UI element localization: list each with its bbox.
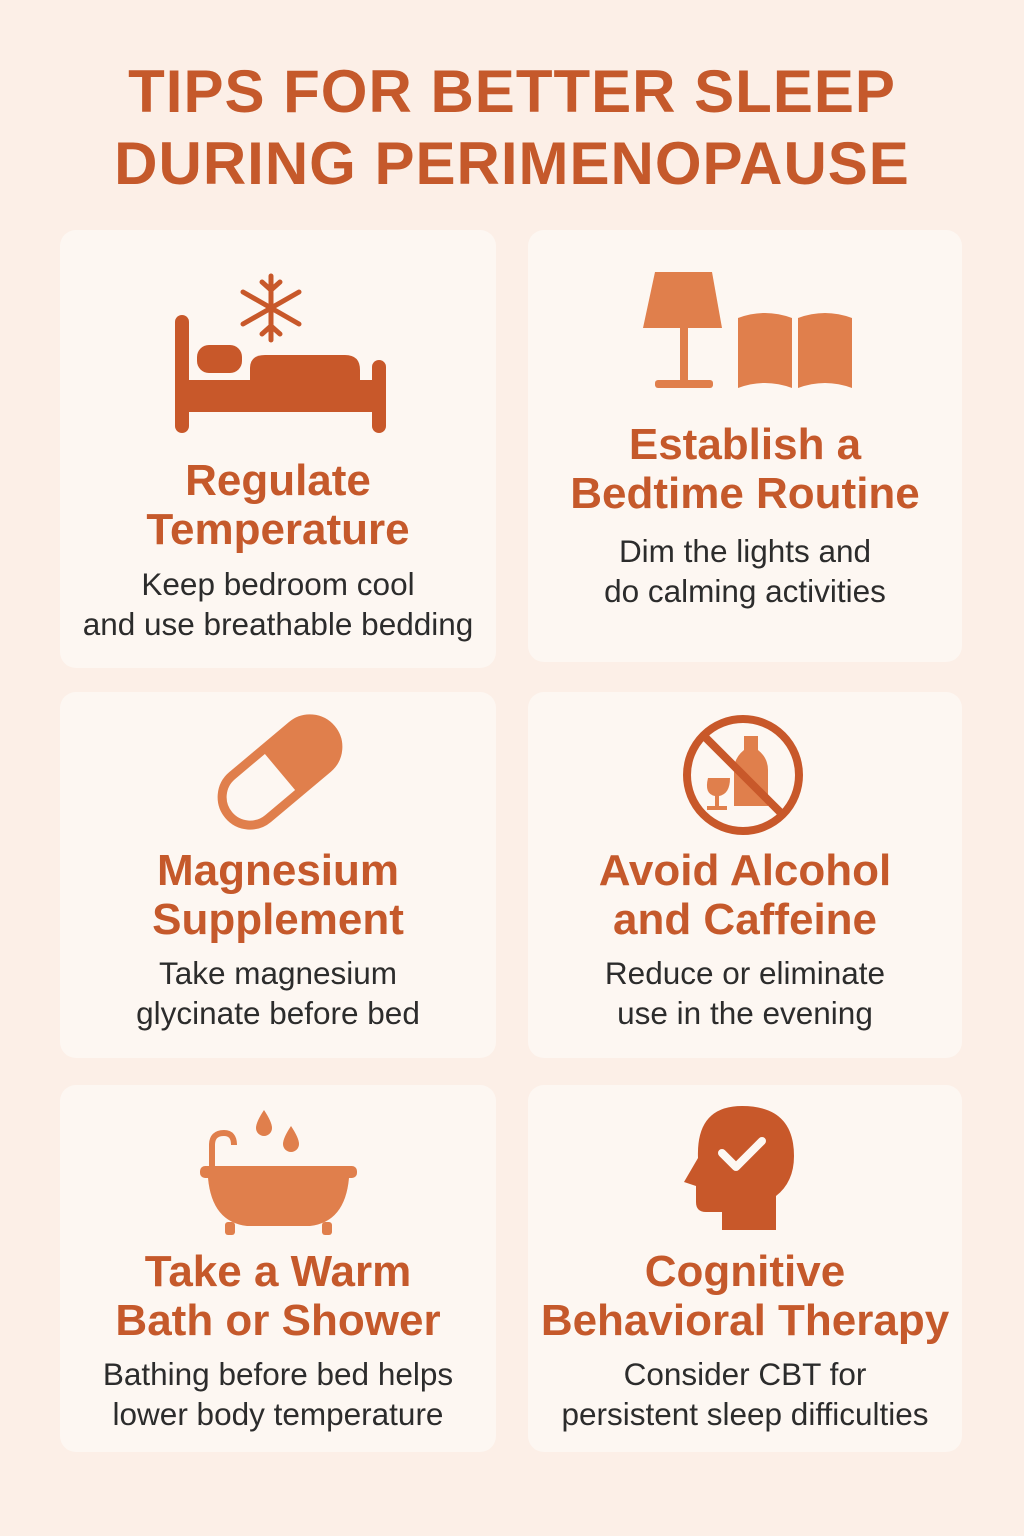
text: alcohol: Reduce or eliminate <box>605 955 885 991</box>
heading: magnesium: Magnesium <box>157 846 399 895</box>
heading: regulate temperature: Regulate <box>185 456 371 505</box>
heading: CBT: Behavioral Therapy <box>541 1296 949 1345</box>
panel: regulate temperature <box>60 230 496 668</box>
text: CBT: Consider CBT for <box>624 1356 866 1392</box>
panel: alcohol caffeine <box>528 692 962 1058</box>
heading: bedtime routine: Bedtime Routine <box>570 469 920 518</box>
heading: alcohol <box>599 846 891 944</box>
icon: no alcohol <box>687 719 799 831</box>
heading: bedtime routine <box>570 420 920 518</box>
panel: warm bath <box>60 1085 496 1452</box>
heading: CBT: Cognitive <box>645 1247 845 1296</box>
text: CBT <box>561 1356 929 1432</box>
heading: magnesium <box>152 846 404 944</box>
text: routine <box>604 533 886 609</box>
panel: magnesium <box>60 692 496 1058</box>
icon: lamp and book <box>643 272 852 388</box>
text: alcohol <box>605 955 885 1031</box>
text: bath: lower body temperature <box>113 1396 443 1432</box>
heading: bath: Take a Warm <box>145 1247 411 1296</box>
text: regulate <box>83 566 473 642</box>
heading: bath <box>115 1247 441 1345</box>
icon: bed with snowflake <box>175 276 386 433</box>
text: routine: do calming activities <box>604 573 886 609</box>
icon: head with check <box>684 1106 794 1230</box>
heading: CBT <box>541 1247 949 1345</box>
title <box>114 58 910 197</box>
title: TIPS FOR BETTER SLEEP <box>128 58 896 125</box>
heading: regulate temperature <box>146 456 410 554</box>
text: regulate: and use breathable bedding <box>83 606 473 642</box>
heading: alcohol: and Caffeine <box>613 895 877 944</box>
heading: bath: Bath or Shower <box>115 1296 441 1345</box>
heading: regulate temperature: Temperature <box>146 505 410 554</box>
panel: CBT <box>528 1085 962 1452</box>
title: DURING PERIMENOPAUSE <box>114 130 910 197</box>
icon: pill <box>211 707 349 837</box>
heading: bedtime routine: Establish a <box>629 420 861 469</box>
icon: bathtub <box>200 1110 357 1235</box>
text: magnesium: Take magnesium <box>159 955 397 991</box>
text: routine: Dim the lights and <box>619 533 871 569</box>
heading: magnesium: Supplement <box>152 895 404 944</box>
text: CBT: persistent sleep difficulties <box>561 1396 929 1432</box>
text: bath <box>103 1356 453 1432</box>
text: bath: Bathing before bed helps <box>103 1356 453 1392</box>
heading: alcohol: Avoid Alcohol <box>599 846 891 895</box>
text: magnesium <box>136 955 420 1031</box>
text: alcohol: use in the evening <box>617 995 873 1031</box>
panel: bedtime routine <box>528 230 962 662</box>
text: magnesium: glycinate before bed <box>136 995 420 1031</box>
text: regulate: Keep bedroom cool <box>141 566 415 602</box>
